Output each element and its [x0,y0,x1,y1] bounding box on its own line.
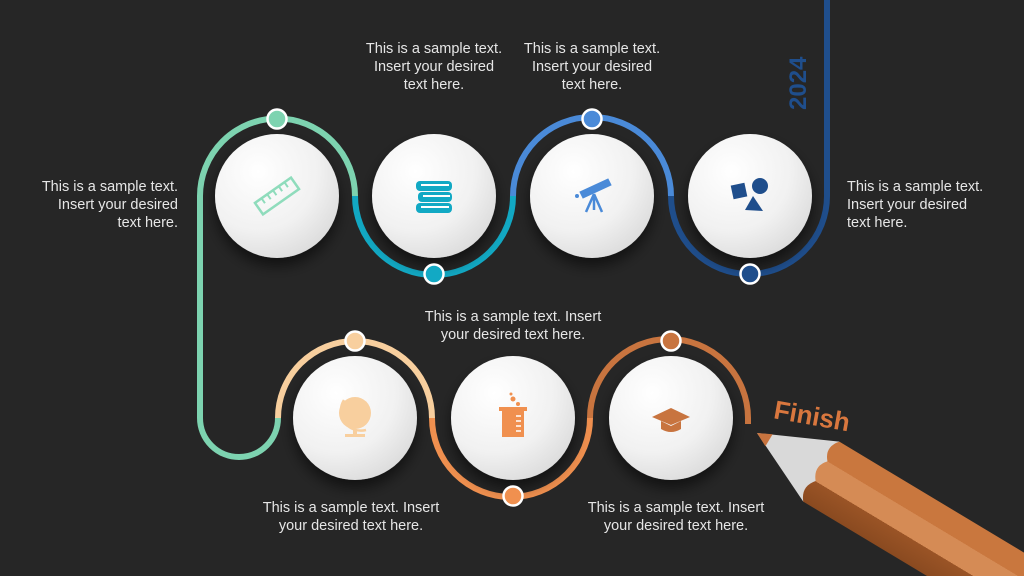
text: step 1: Insert your desired [58,197,178,213]
text: step 2: This is a sample text. [366,41,502,57]
year label: 2024 [785,56,812,110]
text: step 2: text here. [404,77,464,93]
text: step 3: This is a sample text. [524,41,660,57]
text: step 2 [366,41,502,93]
icon: globe [339,397,371,437]
circles [215,134,812,480]
icon: shapes [731,178,768,211]
text: step 6: your desired text here. [441,327,585,343]
text: step 1: This is a sample text. [42,179,178,195]
text: step 4: text here. [847,215,907,231]
icon: beaker [499,392,527,437]
text: step 3: text here. [562,77,622,93]
text: step 6: This is a sample text. Insert [425,309,601,325]
text: step 7: your desired text here. [604,518,748,534]
icon: books [416,181,452,213]
text: step 5 [263,500,440,534]
text: step 3: Insert your desired [532,59,652,75]
text: step 2: Insert your desired [374,59,494,75]
pencil [739,403,1024,576]
text: step 6 [425,309,602,343]
icon: ruler [255,178,299,214]
finish label: Finish [772,395,852,437]
text: step 4 [847,179,983,231]
text: step 4: Insert your desired [847,197,967,213]
text: step 7: This is a sample text. Insert [588,500,764,516]
dots [268,110,760,506]
text: step 5: your desired text here. [279,518,423,534]
icon: graduation cap [652,408,690,432]
text: step 5: This is a sample text. Insert [263,500,439,516]
text: step 1: text here. [118,215,178,231]
icon: telescope [576,179,611,212]
text: step 3 [524,41,660,93]
text: step 4: This is a sample text. [847,179,983,195]
path segments [200,0,827,497]
text: step 7 [588,500,764,534]
text: step 1 [42,179,178,231]
